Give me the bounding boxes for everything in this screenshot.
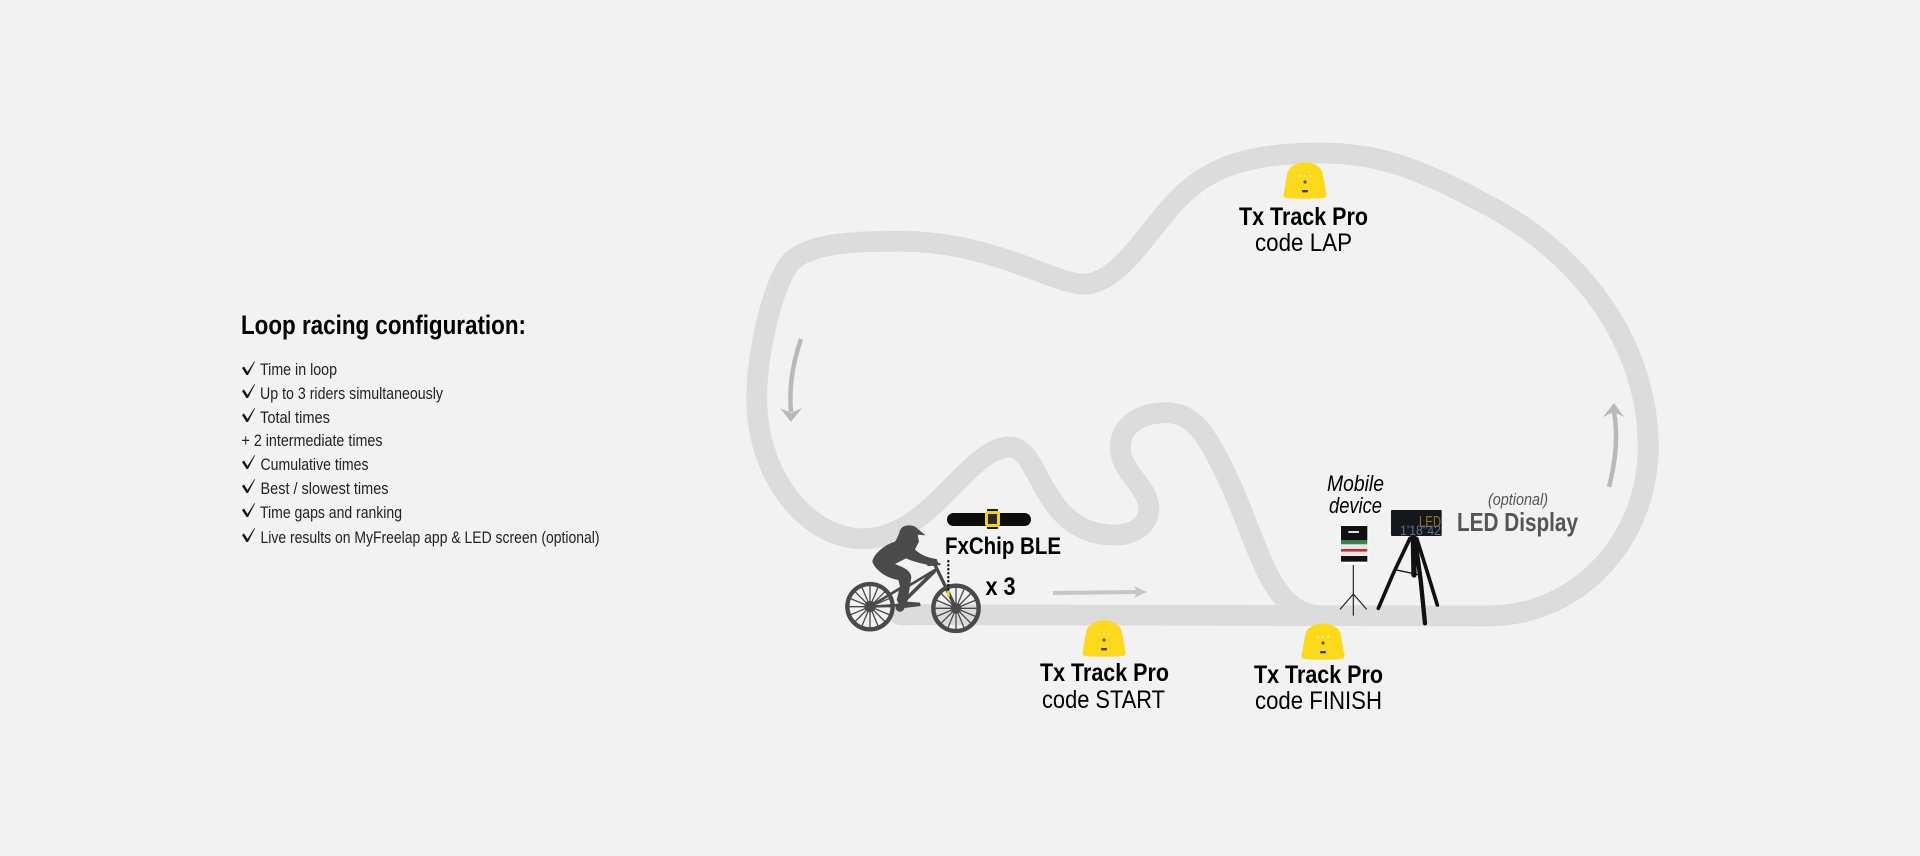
feature list: + 2 intermediate times xyxy=(242,432,382,450)
feature list: Live results on MyFreelap app & LED screen (optional) xyxy=(260,529,600,547)
feature list: Time in loop xyxy=(260,361,337,379)
feature list: Total times xyxy=(260,409,330,427)
bike frame xyxy=(870,564,956,612)
rear wheel xyxy=(847,584,893,629)
label: Mobile device: device xyxy=(1329,493,1382,518)
device: Tx Track Pro LAP xyxy=(1283,162,1327,199)
front wheel xyxy=(933,586,979,631)
arrow: bottom direction xyxy=(1053,586,1147,598)
left panel: loop racing configuration xyxy=(241,310,600,547)
icon: FxChip BLE band xyxy=(947,509,1031,529)
label: optional LED Display: (optional) xyxy=(1488,490,1548,509)
device: Tx Track Pro START xyxy=(1082,620,1126,657)
LED panel text: 1'18"42 xyxy=(1400,522,1441,538)
label: Tx Track Pro code START: Tx Track Pro xyxy=(1040,659,1169,687)
feature list: Cumulative times xyxy=(260,456,368,474)
icon: tablet on stand xyxy=(1340,525,1368,616)
tablet xyxy=(1340,525,1368,564)
label: Tx Track Pro code FINISH: code FINISH xyxy=(1255,687,1382,715)
label: Tx Track Pro code FINISH xyxy=(1254,661,1383,715)
icon: rider on mountain bike xyxy=(847,525,979,631)
chip on fork xyxy=(947,591,950,597)
LED panel xyxy=(1391,510,1442,536)
label: Tx Track Pro code LAP: Tx Track Pro xyxy=(1239,203,1368,231)
label: Tx Track Pro code START xyxy=(1040,659,1169,714)
label: optional LED Display: LED Display xyxy=(1457,507,1578,537)
heading: Loop racing configuration: xyxy=(241,310,526,340)
label: FxChip BLE: FxChip BLE xyxy=(945,533,1061,560)
feature list: Up to 3 riders simultaneously xyxy=(260,385,444,403)
tripod xyxy=(1378,537,1437,623)
feature list: Time gaps and ranking xyxy=(260,504,402,522)
icon: LED display on tripod xyxy=(1378,510,1442,623)
arrow: right direction xyxy=(1603,403,1624,487)
label: Mobile device xyxy=(1327,471,1384,518)
LED panel text xyxy=(1400,514,1441,538)
arrow: left direction xyxy=(780,339,802,422)
label: optional LED Display xyxy=(1457,490,1578,537)
label: Tx Track Pro code FINISH: Tx Track Pro xyxy=(1254,661,1383,689)
label: Tx Track Pro code LAP xyxy=(1239,203,1368,257)
label: Tx Track Pro code START: code START xyxy=(1042,686,1165,714)
rider silhouette xyxy=(872,525,939,608)
LED panel text: LED xyxy=(1419,514,1441,531)
label: Mobile device: Mobile xyxy=(1327,471,1384,496)
stand xyxy=(1340,565,1367,616)
device: Tx Track Pro FINISH xyxy=(1301,623,1345,660)
chip link dotted line xyxy=(945,560,951,590)
check marks xyxy=(242,361,255,542)
feature list xyxy=(242,361,600,547)
race track loop xyxy=(757,153,1648,616)
label: x 3: x 3 xyxy=(986,573,1016,601)
label: Tx Track Pro code LAP: code LAP xyxy=(1255,229,1352,257)
feature list: Best / slowest times xyxy=(260,480,388,498)
